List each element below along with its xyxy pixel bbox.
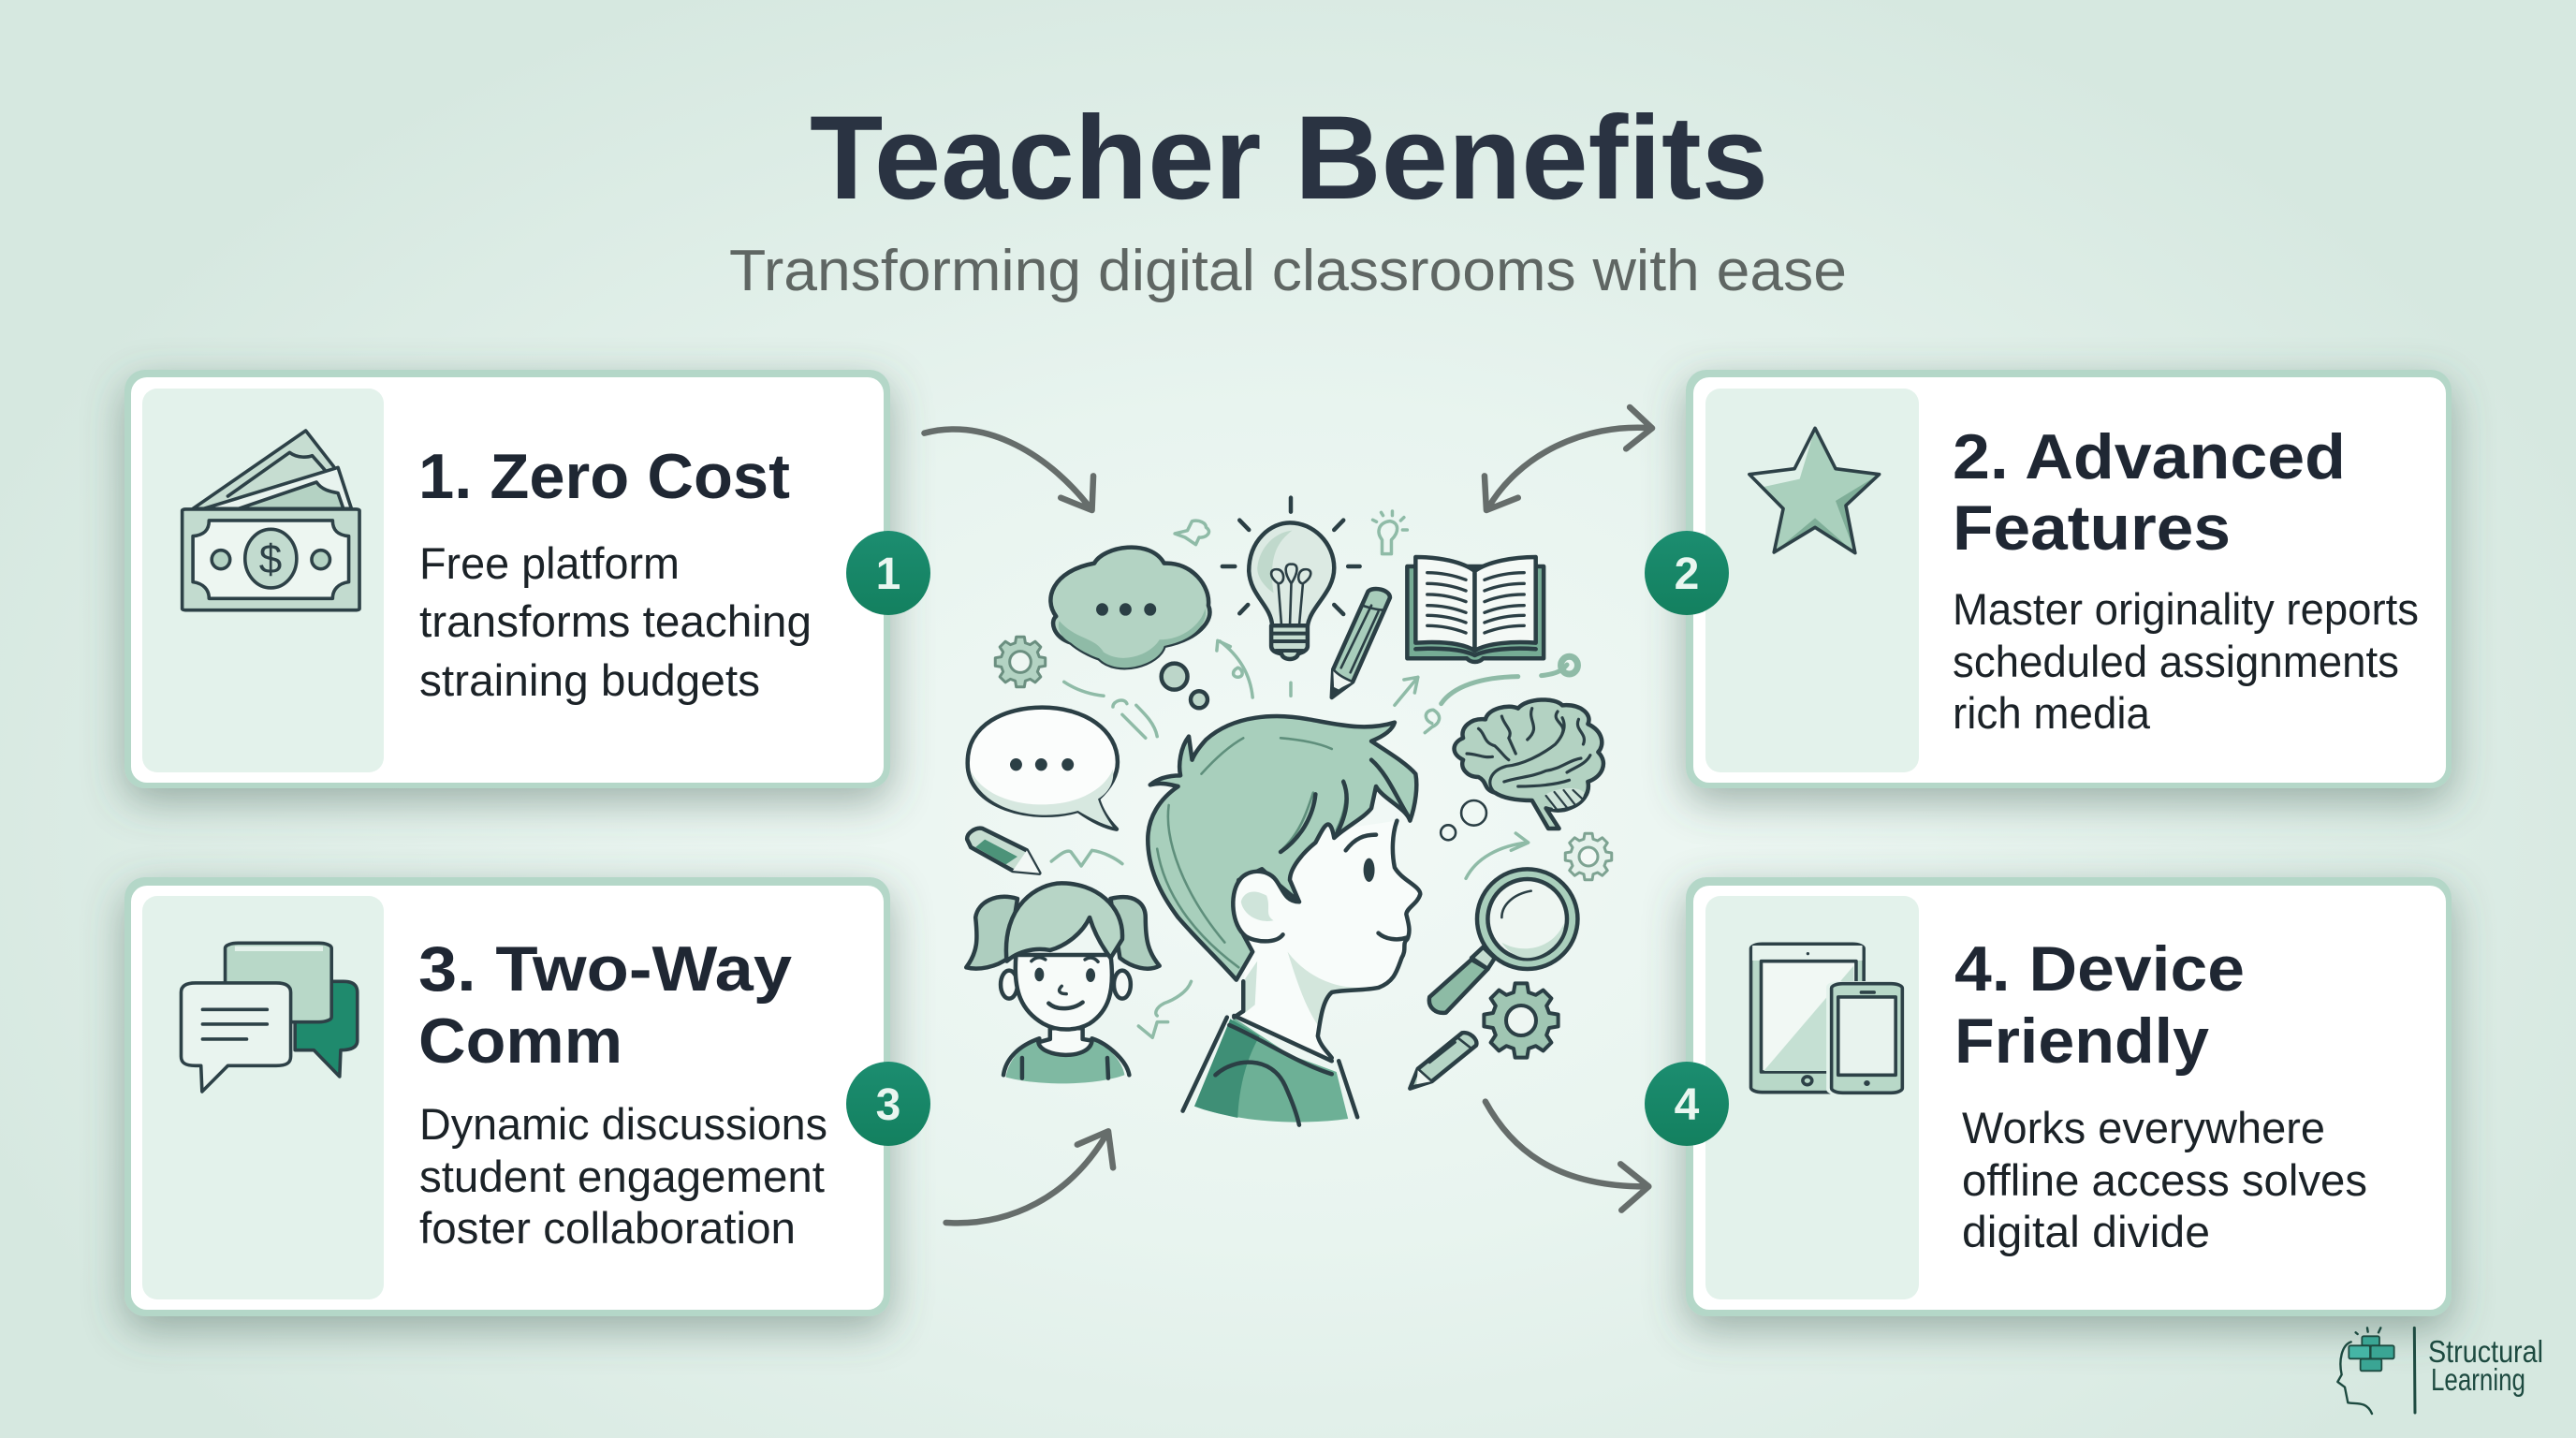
boy hair: [1148, 716, 1416, 980]
dollar sign: $: [259, 536, 282, 582]
badge 1: 1: [876, 550, 900, 599]
card 3 body: student engagement: [419, 1152, 825, 1201]
logo: Structural Learning: [2337, 1328, 2543, 1414]
arrow: card 3 to centre: [946, 1131, 1113, 1223]
icon: gear right small: [1565, 833, 1612, 880]
badge 2: [1645, 531, 1729, 615]
card 4 body: [1962, 1103, 2367, 1256]
card 3 heading: [418, 933, 792, 1077]
logo wordmark: [2428, 1334, 2543, 1397]
panel: card 3 two-way comm: [124, 877, 890, 1316]
card 2 heading: Features: [1953, 492, 2231, 564]
logo mark: [2337, 1328, 2415, 1414]
icon: gear right large: [1484, 983, 1559, 1058]
card 2 heading: [1953, 421, 2346, 564]
logo wordmark: Structural: [2428, 1334, 2543, 1369]
card 3 heading: 3. Two-Way: [418, 933, 792, 1005]
card 3 body: foster collaboration: [419, 1203, 796, 1253]
card 4 body: digital divide: [1962, 1207, 2210, 1256]
icon: thought cloud: [1050, 548, 1209, 708]
title: Teacher Benefits: [810, 91, 1768, 224]
card 4 heading: 4. Device: [1954, 933, 2245, 1005]
icon: pencil upright: [1332, 589, 1390, 697]
icon: pencil lower right: [1410, 1033, 1476, 1089]
card 4 body: Works everywhere: [1962, 1103, 2325, 1152]
icon: gear left: [995, 637, 1046, 687]
icon: star: [1749, 428, 1880, 553]
icon: banknotes: [183, 431, 359, 610]
card 4 body: offline access solves: [1962, 1155, 2367, 1205]
logo wordmark: Learning: [2431, 1362, 2525, 1397]
badge 3: [846, 1062, 930, 1146]
icon: speech bubble: [968, 708, 1118, 829]
card 1 body: transforms teaching: [419, 596, 812, 646]
icon: magnifying glass: [1429, 869, 1577, 1013]
badge 2: 2: [1675, 550, 1699, 599]
subtitle: Transforming digital classrooms with ease: [729, 239, 1847, 303]
icon: tablet and phone: [1751, 944, 1907, 1095]
figure: girl: [966, 883, 1160, 1083]
figure: boy in profile: [1148, 716, 1420, 1125]
card 1 body: [419, 538, 812, 705]
icon: light bulb: [1222, 498, 1360, 659]
card 2 body: Master originality reports: [1953, 584, 2419, 634]
central illustration: [966, 498, 1612, 1125]
boy ear: [1233, 872, 1299, 941]
card 1 heading: 1. Zero Cost: [418, 441, 790, 512]
icon: small pencil left: [967, 829, 1192, 1037]
card 2 body: rich media: [1953, 688, 2151, 738]
card 4 heading: [1954, 933, 2245, 1077]
card 2 body: scheduled assignments: [1953, 637, 2399, 686]
badge 4: [1645, 1062, 1729, 1146]
card 1 body: Free platform: [419, 538, 680, 588]
boy shirt: [1194, 1018, 1348, 1123]
arrow: centre to card 2 double headed: [1485, 407, 1652, 510]
badge 3: 3: [876, 1080, 900, 1130]
card 4 heading: Friendly: [1954, 1005, 2209, 1077]
card 2 body: [1953, 584, 2419, 738]
card 3 body: [419, 1099, 827, 1253]
icon: open book: [1407, 557, 1544, 662]
panel: card 1 zero cost: [124, 370, 890, 788]
card 1 body: straining budgets: [419, 655, 760, 705]
boy face profile: [1318, 821, 1420, 1058]
panel: card 4 device friendly: [1686, 877, 2452, 1316]
panel: card 2 advanced features: [1686, 370, 2452, 788]
arrow: card 1 to centre: [924, 429, 1093, 510]
badge 1: [846, 531, 930, 615]
card 2 heading: 2. Advanced: [1953, 421, 2346, 492]
card 3 heading: Comm: [418, 1005, 622, 1077]
arrow: centre to card 4: [1486, 1102, 1648, 1211]
decorative doodles top: [1064, 511, 1577, 738]
icon: chat bubbles: [181, 943, 358, 1092]
card 3 body: Dynamic discussions: [419, 1099, 827, 1149]
badge 4: 4: [1675, 1080, 1700, 1130]
icon: brain: [1441, 699, 1603, 878]
